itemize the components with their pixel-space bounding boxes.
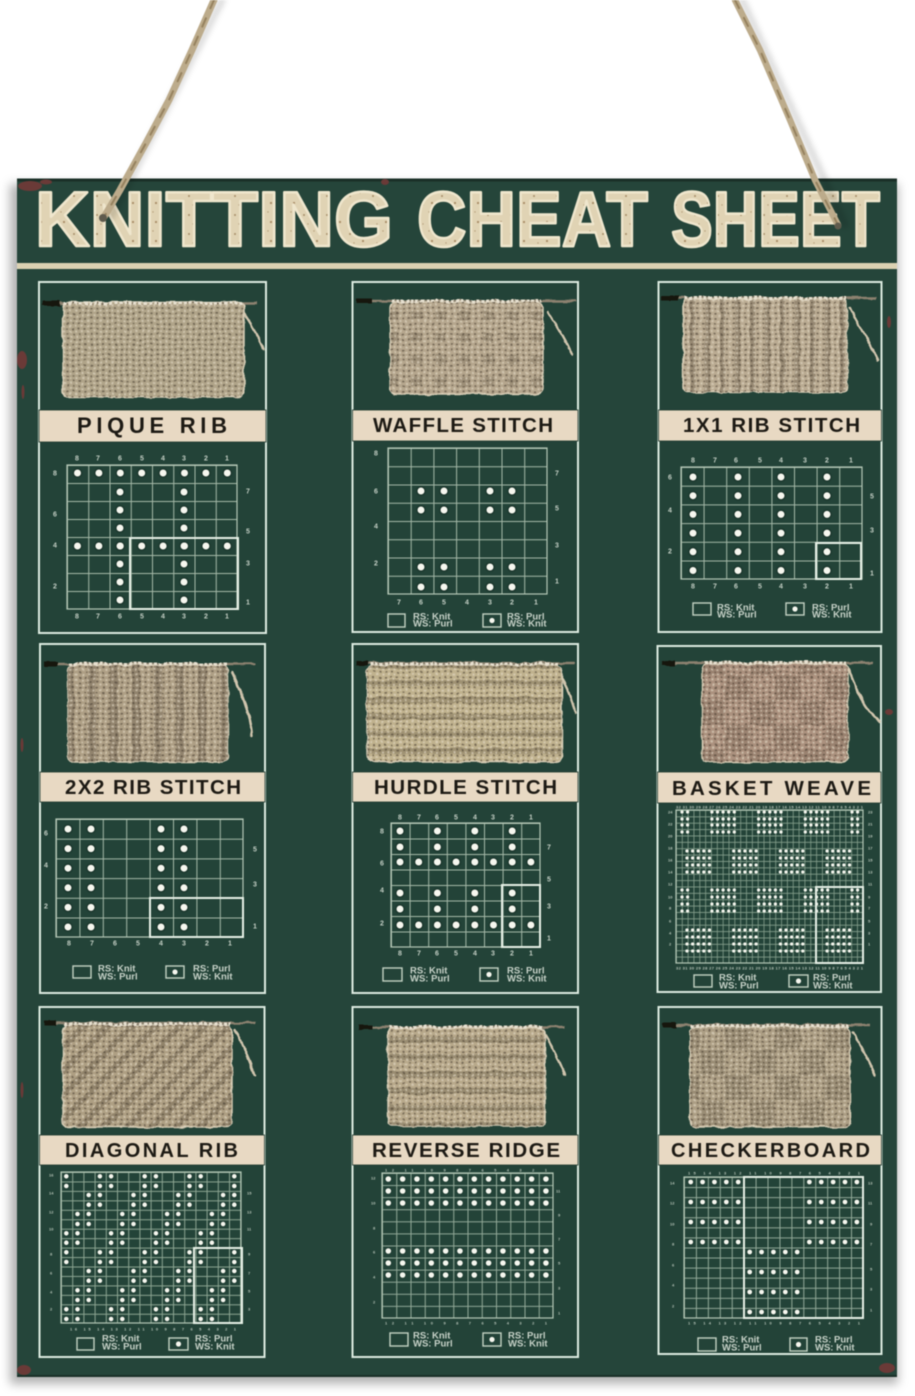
stitch chart: 1x1 rib stitch: 531 <box>870 494 874 578</box>
stitch chart: reverse ridge: 4 <box>373 1274 376 1280</box>
panel: 2x2 rib stitch <box>40 644 265 993</box>
stitch chart: checkerboard: 7 <box>870 1242 873 1246</box>
stitch chart: reverse ridge: 8 <box>373 1226 376 1230</box>
stitch chart: reverse ridge: 12 11 10 9 8 7 6 5 4 3 2 1 <box>385 1320 548 1326</box>
stitch chart: basket weave: 4 <box>669 930 672 936</box>
legend: hurdle stitch: RS: Knit <box>410 966 448 976</box>
stitch chart: waffle stitch: 7654321 <box>397 600 538 606</box>
legend: 2x2 rib stitch: RS: Knit <box>98 964 136 974</box>
stitch chart: basket weave: 32 31 30 29 28 27 26 25 24 23 22 21 20 19 18 17 16 15 14 13 12 11 10 9 8 7 6 5 4 3 2 1 <box>676 966 864 970</box>
legend: diagonal rib: WS: Purl <box>102 1342 142 1352</box>
title <box>35 175 880 263</box>
title: CHEAT <box>417 175 648 263</box>
stitch chart: reverse ridge: 7 <box>558 1236 561 1242</box>
stitch chart: checkerboard: 5 <box>870 1266 873 1272</box>
knit swatch: diagonal rib <box>44 1023 256 1127</box>
label band: diagonal rib <box>40 1135 264 1165</box>
stitch chart: reverse ridge: 10 <box>371 1200 376 1206</box>
legend: hurdle stitch: WS: Knit <box>507 974 547 984</box>
legend: diagonal rib: RS: Purl <box>195 1334 232 1344</box>
stitch chart: waffle stitch: 7531 <box>555 470 559 586</box>
stitch chart: basket weave <box>668 804 873 970</box>
legend: checkerboard: RS: Purl <box>815 1334 852 1346</box>
label band: pique rib <box>39 410 266 442</box>
stitch chart: basket weave: 21 <box>868 822 873 826</box>
stitch chart: basket weave: 15 <box>868 858 873 862</box>
stitch chart: basket weave: 32 31 30 29 28 27 26 25 24 23 22 21 20 19 18 17 16 15 14 13 12 11 10 9 8 7 6 5 4 3 2 1 <box>676 804 864 810</box>
legend: diagonal rib: RS: Knit <box>102 1334 140 1344</box>
label band: basket weave: BASKET WEAVE <box>672 777 871 800</box>
stitch chart: pique rib: 87654321 <box>75 614 229 620</box>
knit swatch: waffle stitch <box>356 301 576 394</box>
legend: 1x1 rib stitch: RS: Knit <box>717 602 755 614</box>
label band: 1x1 rib stitch: 1X1 RIB STITCH <box>683 414 860 437</box>
stitch chart: basket weave: 24 <box>668 810 673 814</box>
title rule <box>17 263 897 269</box>
stitch chart: pique rib: 7531 <box>246 488 250 606</box>
legend: basket weave <box>694 972 853 992</box>
stitch chart: checkerboard: 10 <box>670 1222 675 1226</box>
stitch chart: diagonal rib: 15 <box>247 1190 252 1196</box>
stitch chart: basket weave: 6 <box>669 918 672 924</box>
label band: checkerboard: CHECKERBOARD <box>671 1140 870 1162</box>
legend: basket weave: WS: Purl <box>719 980 759 992</box>
legend: checkerboard: WS: Purl <box>722 1342 762 1354</box>
stitch chart: basket weave: 18 <box>668 846 673 850</box>
legend: hurdle stitch: WS: Purl <box>410 974 450 984</box>
stitch chart: 1x1 rib stitch: 642 <box>668 474 672 556</box>
label band: basket weave <box>658 772 881 803</box>
title: KNITTING <box>35 175 393 263</box>
stitch chart: checkerboard: 2 <box>672 1304 675 1308</box>
stitch chart: diagonal rib: 5 <box>248 1288 251 1294</box>
label band: waffle stitch: WAFFLE STITCH <box>373 414 553 437</box>
stitch chart: checkerboard: 15 14 13 12 11 10 9 8 7 6 5 4 3 2 1 <box>688 1320 861 1326</box>
stitch chart: diagonal rib: 11 <box>247 1226 252 1232</box>
stitch chart: basket weave: 3 <box>868 930 871 936</box>
stitch chart: waffle stitch <box>374 448 559 606</box>
stitch chart: reverse ridge <box>371 1168 561 1326</box>
legend: 1x1 rib stitch: WS: Knit <box>812 610 852 620</box>
stitch chart: diagonal rib: 8 <box>50 1252 53 1256</box>
stitch chart: diagonal rib: 4 <box>50 1290 53 1294</box>
stitch chart: diagonal rib: 16 15 14 13 12 11 10 9 8 7 6 5 4 3 2 1 <box>70 1326 237 1332</box>
legend: waffle stitch: RS: Knit <box>413 612 451 622</box>
legend: waffle stitch: WS: Purl <box>413 618 453 630</box>
stitch chart: 2x2 rib stitch: 642 <box>44 830 48 910</box>
legend: waffle stitch: RS: Purl <box>507 612 544 622</box>
legend: 2x2 rib stitch: WS: Knit <box>193 972 233 982</box>
legend: waffle stitch: WS: Knit <box>507 618 547 630</box>
label band: diagonal rib: DIAGONAL RIB <box>65 1140 238 1162</box>
stitch chart: basket weave: 16 <box>668 858 673 862</box>
stitch chart: basket weave: 10 <box>668 894 673 900</box>
knit swatch: 1x1 rib stitch <box>662 298 878 392</box>
stitch chart: reverse ridge: 6 <box>373 1250 376 1254</box>
legend: diagonal rib <box>77 1334 235 1352</box>
legend: 1x1 rib stitch: RS: Purl <box>812 602 849 614</box>
stitch chart: reverse ridge: 9 <box>558 1212 561 1218</box>
stitch chart: 1x1 rib stitch <box>668 458 874 590</box>
stitch chart: diagonal rib: 16 <box>49 1172 54 1178</box>
stitch chart: pique rib <box>53 456 250 620</box>
stitch chart: checkerboard: 9 <box>870 1222 873 1226</box>
label band: hurdle stitch <box>352 772 578 802</box>
stitch chart: basket weave: 20 <box>668 834 673 838</box>
label band: reverse ridge <box>352 1135 578 1165</box>
label band: pique rib: PIQUE RIB <box>77 413 227 438</box>
stitch chart: diagonal rib: 13 <box>247 1210 252 1214</box>
label band: hurdle stitch: HURDLE STITCH <box>374 776 557 799</box>
stitch chart: reverse ridge: 1 <box>558 1310 561 1316</box>
stitch chart: reverse ridge: 5 <box>558 1260 561 1266</box>
label band: 2x2 rib stitch: 2X2 RIB STITCH <box>65 776 241 799</box>
knit swatch: checkerboard <box>662 1025 875 1127</box>
stitch chart: pique rib: 87654321 <box>75 456 229 462</box>
legend: diagonal rib: WS: Knit <box>195 1342 235 1352</box>
stitch chart: hurdle stitch: 87654321 <box>398 814 533 822</box>
stitch chart: basket weave: 14 <box>668 870 673 874</box>
stitch chart: basket weave: 12 <box>668 882 673 886</box>
stitch chart: basket weave: 8 <box>669 906 672 910</box>
legend: basket weave: WS: Knit <box>813 980 853 992</box>
legend: 2x2 rib stitch: RS: Purl <box>193 964 230 974</box>
legend: 1x1 rib stitch: WS: Purl <box>717 610 757 620</box>
legend: checkerboard: WS: Knit <box>815 1342 855 1354</box>
stitch chart: diagonal rib: 9 <box>248 1252 251 1256</box>
stitch chart: diagonal rib: 12 <box>49 1210 54 1214</box>
panel: basket weave <box>658 646 881 992</box>
legend: reverse ridge: RS: Purl <box>508 1330 545 1342</box>
label band: 1x1 rib stitch <box>658 410 882 441</box>
legend: checkerboard <box>698 1334 855 1354</box>
stitch chart: waffle stitch: 8642 <box>374 450 378 568</box>
panel: 1x1 rib stitch <box>658 282 882 632</box>
panel: hurdle stitch <box>352 644 578 993</box>
stitch chart: checkerboard: 6 <box>672 1262 675 1268</box>
legend: checkerboard: RS: Knit <box>722 1334 760 1346</box>
stitch chart: basket weave: 1 <box>868 942 871 946</box>
panel: reverse ridge <box>352 1007 578 1357</box>
stitch chart: diagonal rib: 6 <box>50 1270 53 1276</box>
stitch chart: basket weave: 19 <box>868 834 873 838</box>
stitch chart: basket weave: 11 <box>868 882 873 886</box>
label band: 2x2 rib stitch <box>40 772 265 802</box>
stitch chart: checkerboard: 1 <box>870 1308 873 1312</box>
stitch chart: checkerboard: 13 <box>868 1180 873 1186</box>
stitch chart: basket weave: 22 <box>668 822 673 826</box>
stitch chart: checkerboard: 3 <box>870 1286 873 1292</box>
stitch chart: basket weave: 2 <box>669 942 672 946</box>
legend: basket weave: RS: Purl <box>813 972 850 984</box>
stitch chart: basket weave: 9 <box>868 894 871 900</box>
panel: pique rib <box>39 282 266 633</box>
stitch chart: 2x2 rib stitch: 531 <box>253 846 257 930</box>
stitch chart: 2x2 rib stitch <box>44 819 257 948</box>
knit swatch: pique rib <box>43 302 263 397</box>
stitch chart: reverse ridge: 12 11 10 9 8 7 6 5 4 3 2 1 <box>385 1168 548 1172</box>
stitch chart: 1x1 rib stitch: 87654321 <box>691 458 853 464</box>
stitch chart: checkerboard: 4 <box>672 1282 675 1288</box>
legend: reverse ridge <box>390 1330 548 1350</box>
knit swatch: hurdle stitch <box>356 663 575 762</box>
stitch chart: basket weave: 17 <box>868 846 873 850</box>
stitch chart: checkerboard: 11 <box>868 1200 873 1206</box>
legend: 2x2 rib stitch <box>73 964 233 982</box>
legend: waffle stitch <box>388 612 547 630</box>
stitch chart: hurdle stitch: 87654321 <box>398 950 533 958</box>
stitch chart: 2x2 rib stitch: 87654321 <box>67 940 232 948</box>
stitch chart: diagonal rib: 14 <box>49 1190 54 1196</box>
stitch chart: reverse ridge: 3 <box>558 1286 561 1290</box>
knit swatch: 2x2 rib stitch <box>44 664 255 762</box>
legend: reverse ridge: WS: Purl <box>413 1338 453 1350</box>
panel: waffle stitch <box>352 282 578 632</box>
knit swatch: reverse ridge <box>358 1027 565 1126</box>
stitch chart: hurdle stitch: 8642 <box>380 828 384 928</box>
stitch chart: basket weave: 7 <box>868 906 871 910</box>
stitch chart: basket weave: 13 <box>868 870 873 874</box>
stitch chart: diagonal rib: 3 <box>248 1306 251 1312</box>
legend: hurdle stitch: RS: Purl <box>507 966 544 976</box>
stitch chart: basket weave: 5 <box>868 918 871 924</box>
label band: waffle stitch <box>352 410 578 441</box>
stitch chart: checkerboard <box>670 1170 873 1326</box>
stitch chart: reverse ridge: 11 <box>556 1188 561 1194</box>
stitch chart: 1x1 rib stitch: 87654321 <box>691 584 853 590</box>
stitch chart: checkerboard: 14 <box>670 1180 675 1186</box>
stitch chart: checkerboard: 8 <box>672 1242 675 1246</box>
label band: checkerboard <box>658 1135 882 1165</box>
legend: reverse ridge: RS: Knit <box>413 1330 451 1342</box>
stitch chart: diagonal rib <box>49 1172 252 1332</box>
knit swatch: basket weave <box>662 663 880 762</box>
legend: 1x1 rib stitch <box>693 602 852 620</box>
stitch chart: hurdle stitch: 7531 <box>547 844 551 942</box>
stitch chart: diagonal rib: 2 <box>50 1306 53 1312</box>
stitch chart: checkerboard: 15 14 13 12 11 10 9 8 7 6 5 4 3 2 1 <box>688 1170 861 1176</box>
legend: hurdle stitch <box>383 966 547 984</box>
legend: basket weave: RS: Knit <box>719 972 757 984</box>
rope right <box>735 0 845 230</box>
panel: diagonal rib <box>40 1007 264 1357</box>
stitch chart: diagonal rib: 7 <box>248 1270 251 1276</box>
stitch chart: reverse ridge: 2 <box>373 1300 376 1304</box>
stitch chart: reverse ridge: 12 <box>371 1176 376 1180</box>
rope left <box>99 0 222 222</box>
label band: reverse ridge: REVERSE RIDGE <box>372 1139 560 1162</box>
stitch chart: diagonal rib: 10 <box>49 1226 54 1232</box>
legend: 2x2 rib stitch: WS: Purl <box>98 972 138 982</box>
panel: checkerboard <box>658 1007 882 1354</box>
stitch chart: checkerboard: 12 <box>670 1200 675 1206</box>
stitch chart: pique rib: 8642 <box>53 470 57 590</box>
stitch chart: basket weave: 23 <box>868 810 873 814</box>
legend: reverse ridge: WS: Knit <box>508 1338 548 1350</box>
stitch chart: hurdle stitch <box>380 814 551 958</box>
